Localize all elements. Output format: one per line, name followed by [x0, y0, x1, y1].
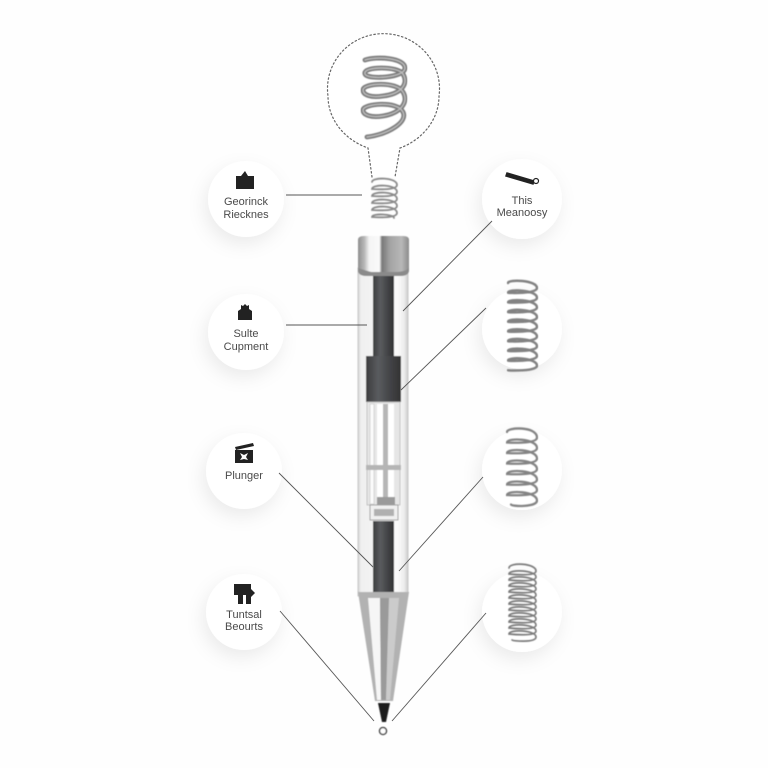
pen device: [358, 236, 409, 734]
upper dark rod: [373, 270, 394, 358]
inner glass cartridge: [366, 402, 401, 505]
ring at tip: [380, 728, 386, 734]
glass tube: [358, 268, 408, 596]
icon: clapperboard: [235, 443, 254, 463]
label: Sulte Cupment: Sulte: [233, 328, 259, 340]
lower dark rod: [373, 521, 394, 593]
panel: right callout This Meanoosy: [482, 159, 562, 239]
label: Georinck Riecknes: Riecknes: [223, 209, 269, 221]
label: Georinck Riecknes: Georinck: [224, 196, 269, 208]
icon: arch block: [234, 584, 255, 604]
spring 3: [509, 564, 536, 641]
icon: building: [238, 304, 252, 320]
panel: left callout Plunger: [206, 433, 282, 509]
large spring in bubble: [363, 58, 405, 137]
label: Sulte Cupment: Cupment: [224, 341, 268, 353]
panel: left callout Georinck Riecknes: [208, 161, 284, 237]
dark collar block: [366, 356, 401, 402]
icon: pen tool: [506, 173, 538, 184]
metal cone: [358, 592, 409, 701]
spring 2: [507, 428, 537, 506]
dotted magnifier bubble: [328, 34, 440, 177]
label: Tuntsal Beourts: Beourts: [225, 621, 263, 633]
panel: right spring circle 3: [482, 564, 562, 652]
black tip: [378, 703, 390, 722]
panel: right spring circle 2: [482, 428, 562, 510]
icon: toolbox: [236, 171, 254, 189]
panel: left callout Sulte Cupment: [208, 294, 284, 370]
label: Plunger: Plunger: [225, 470, 263, 482]
panel: right spring circle 1: [482, 281, 562, 371]
metal label block: [370, 505, 398, 520]
spring 1: [508, 281, 537, 371]
metal cap: [358, 236, 409, 276]
leader lines: [279, 195, 492, 721]
label: This Meanoosy: This: [512, 195, 533, 207]
label: This Meanoosy: Meanoosy: [497, 207, 548, 219]
label: Tuntsal Beourts: Tuntsal: [226, 609, 262, 621]
small spring below bubble: [372, 179, 397, 218]
panel: left callout Tuntsal Beourts: [206, 574, 282, 650]
